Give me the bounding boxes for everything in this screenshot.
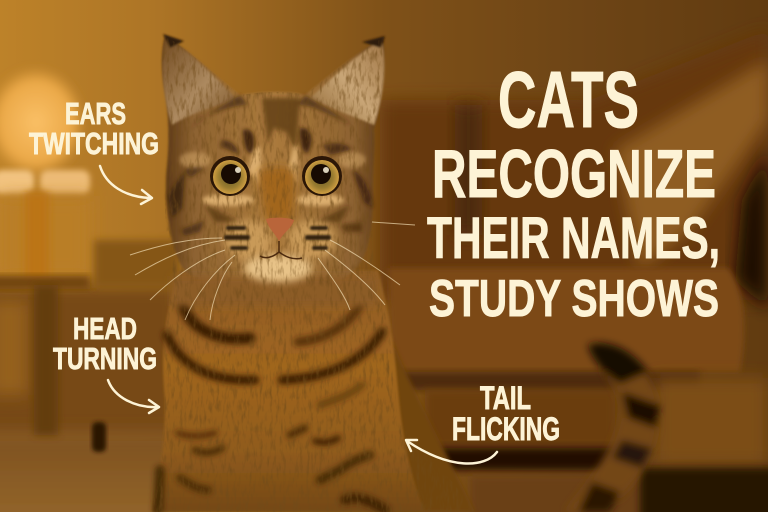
title	[427, 55, 720, 328]
title: CATS	[498, 55, 639, 144]
sofa	[380, 30, 768, 512]
ear right	[310, 36, 385, 125]
eye right	[302, 156, 342, 196]
ear left	[162, 34, 238, 125]
body	[152, 270, 425, 512]
arrow: head	[108, 380, 159, 413]
head	[162, 36, 384, 295]
fur texture	[154, 36, 410, 512]
label: head turning: HEAD	[73, 311, 137, 346]
label: head turning	[53, 311, 157, 376]
label: tail flicking	[452, 380, 560, 447]
whiskers	[130, 222, 415, 320]
whisker spots	[224, 226, 331, 250]
forehead markings	[168, 95, 373, 236]
body stripes	[158, 305, 385, 510]
label: head turning: TURNING	[53, 341, 157, 376]
arrow: ears	[100, 166, 152, 204]
label: ears twitching: EARS	[65, 96, 126, 131]
cat	[130, 30, 480, 512]
eye left	[210, 156, 250, 196]
haunch	[390, 340, 475, 512]
neck blend	[172, 276, 378, 306]
tail	[565, 343, 660, 512]
lamp glow	[0, 66, 106, 452]
label: tail flicking: TAIL	[480, 380, 531, 416]
small sofa behind cat on left	[94, 240, 180, 288]
nose	[260, 218, 302, 259]
muzzle	[224, 220, 336, 282]
lower room wall	[0, 285, 180, 440]
label: tail flicking: FLICKING	[452, 411, 560, 447]
forehead light patches	[179, 145, 366, 206]
label: ears twitching	[29, 96, 159, 161]
nose bridge	[258, 167, 295, 220]
label: ears twitching: TWITCHING	[29, 126, 159, 161]
arrow: tail	[406, 440, 497, 464]
